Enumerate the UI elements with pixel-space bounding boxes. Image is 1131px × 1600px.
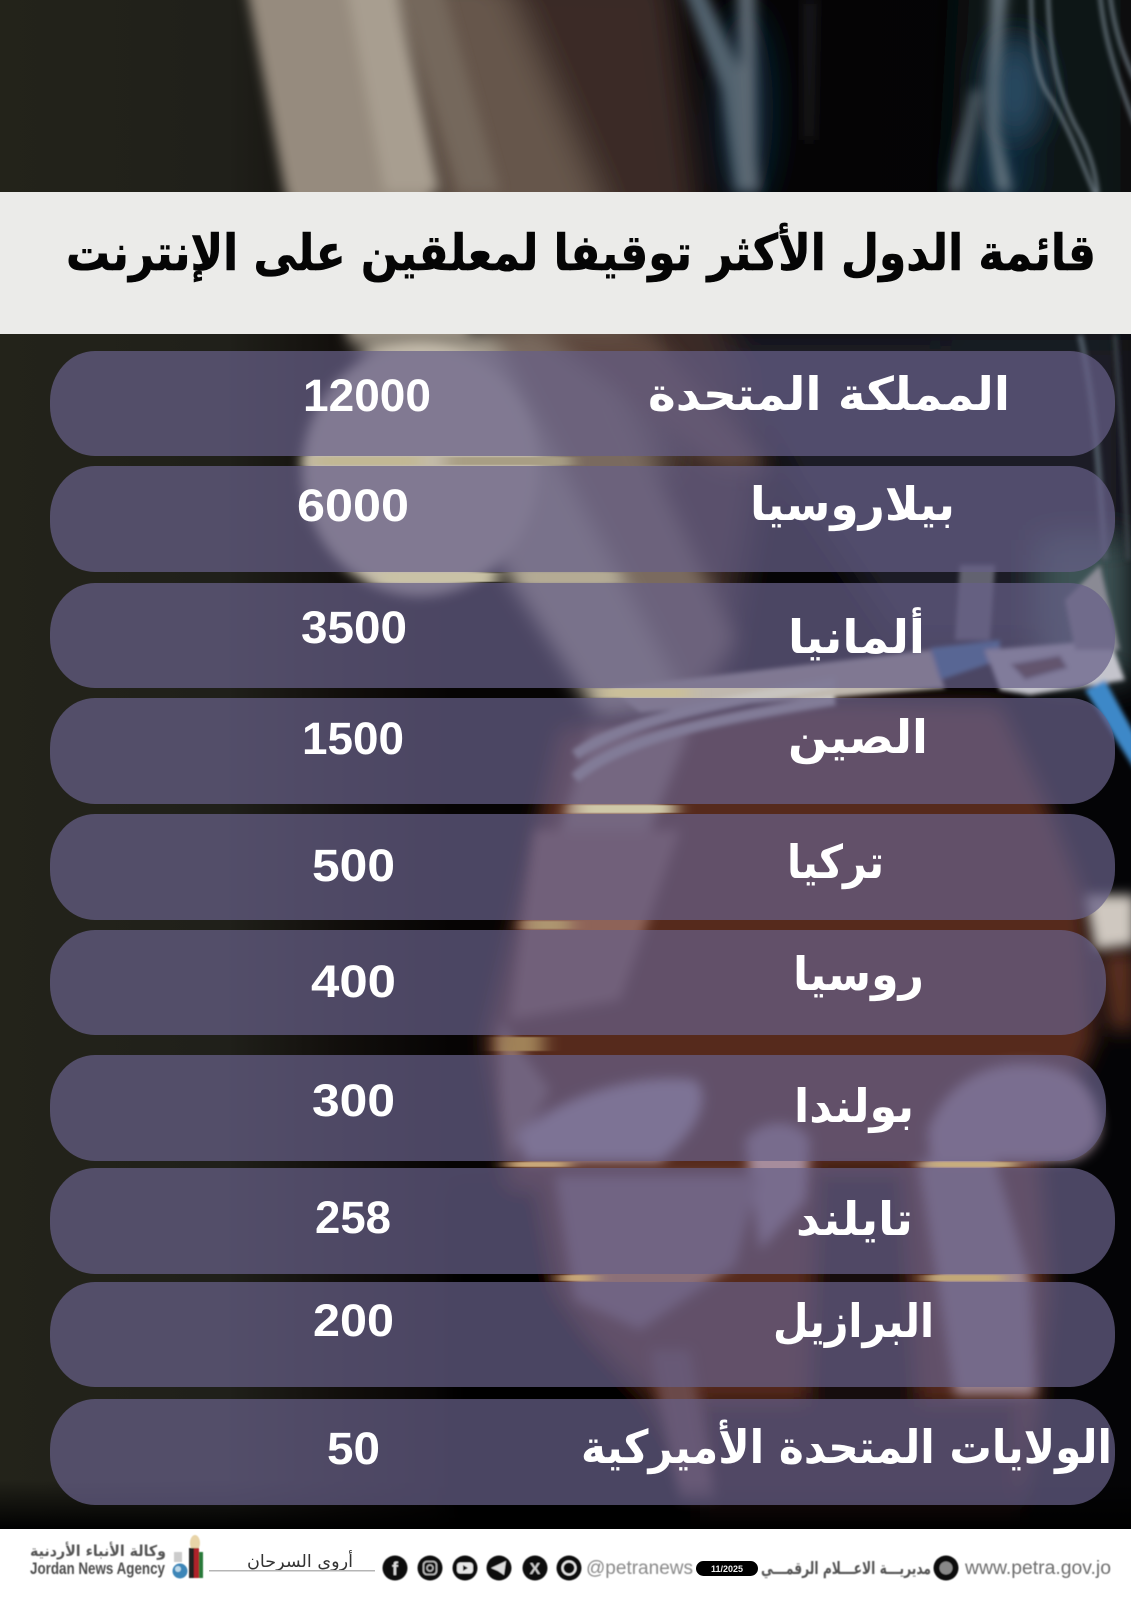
icon: whatsapp bbox=[556, 1556, 582, 1580]
pill bbox=[50, 930, 1106, 1035]
country name: بيلاروسيا bbox=[750, 477, 955, 531]
icon: agency logo bbox=[172, 1535, 203, 1578]
date badge: 11/2025 bbox=[711, 1564, 743, 1574]
date badge bbox=[696, 1561, 758, 1576]
row: United Kingdom bbox=[50, 351, 1115, 456]
row: Turkey bbox=[50, 814, 1115, 920]
value: 300 bbox=[312, 1075, 395, 1126]
row: Belarus bbox=[50, 466, 1115, 572]
row: Russia bbox=[50, 930, 1106, 1035]
value: 1500 bbox=[302, 713, 404, 764]
value: 50 bbox=[327, 1423, 380, 1474]
country name: تركيا bbox=[787, 835, 884, 889]
department text: مديريـــة الاعـــلام الرقمـــي bbox=[761, 1559, 931, 1579]
row: Poland bbox=[50, 1055, 1106, 1161]
country name: بولندا bbox=[794, 1079, 914, 1133]
icon: website globe bbox=[934, 1556, 958, 1580]
value: 12000 bbox=[303, 370, 431, 421]
value: 400 bbox=[311, 956, 396, 1007]
hand mass bbox=[450, 700, 1131, 1530]
pill bbox=[50, 466, 1115, 572]
author name: أروى السرحان bbox=[247, 1550, 353, 1572]
row: Brazil bbox=[50, 1282, 1115, 1387]
country name: البرازيل bbox=[773, 1294, 934, 1348]
icon: instagram bbox=[418, 1556, 442, 1580]
handcuff bbox=[575, 565, 1131, 778]
value: 500 bbox=[312, 840, 395, 891]
value: 200 bbox=[313, 1295, 394, 1346]
pill bbox=[50, 1282, 1115, 1387]
pill bbox=[50, 1055, 1106, 1161]
row: China bbox=[50, 698, 1115, 804]
row: Thailand bbox=[50, 1168, 1115, 1274]
pill bbox=[50, 351, 1115, 456]
icon: x: X bbox=[530, 1561, 541, 1578]
agency name bbox=[30, 1542, 166, 1578]
social icons bbox=[382, 1556, 582, 1580]
pill bbox=[50, 1399, 1115, 1505]
pill bbox=[50, 814, 1115, 920]
author underline bbox=[209, 1570, 375, 1572]
row: Germany bbox=[50, 583, 1115, 688]
icon: facebook bbox=[382, 1556, 408, 1580]
pill bbox=[50, 583, 1115, 688]
icon: telegram bbox=[486, 1556, 512, 1580]
country name: الصين bbox=[788, 710, 928, 764]
country name: روسيا bbox=[793, 947, 924, 1001]
pill bbox=[50, 698, 1115, 804]
title band bbox=[0, 192, 1131, 334]
country name: تايلند bbox=[796, 1192, 913, 1246]
country name: ألمانيا bbox=[788, 607, 925, 664]
icon: facebook: f bbox=[392, 1559, 399, 1579]
website url: www.petra.gov.jo bbox=[964, 1558, 1111, 1579]
icon: x bbox=[522, 1556, 548, 1580]
value: 3500 bbox=[301, 602, 407, 653]
agency name: وكالة الأنباء الأردنية bbox=[30, 1542, 166, 1560]
gap highlights bbox=[312, 457, 1015, 1281]
pill bbox=[50, 1168, 1115, 1274]
footer bbox=[0, 1529, 1131, 1600]
row: United States bbox=[50, 1399, 1115, 1505]
value: 258 bbox=[315, 1192, 391, 1243]
icon: youtube bbox=[452, 1556, 478, 1580]
handle text: @petranews bbox=[586, 1558, 693, 1579]
agency name: Jordan News Agency bbox=[30, 1559, 165, 1578]
value: 6000 bbox=[297, 480, 409, 531]
country name: المملكة المتحدة bbox=[648, 367, 1010, 421]
